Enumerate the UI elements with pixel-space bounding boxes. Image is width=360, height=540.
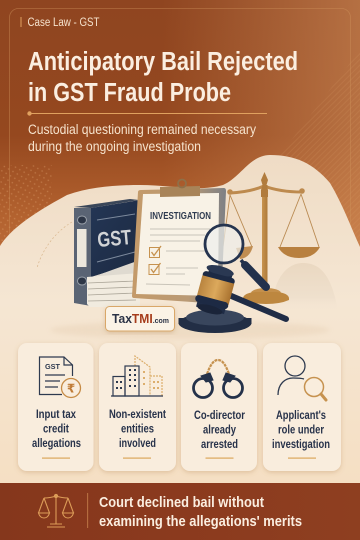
label: entities [121,424,154,436]
label: involved [119,438,156,450]
icon: GST document with rupee [40,357,80,398]
illustration [50,172,338,339]
icon: magnifying glass [205,225,266,287]
label [109,409,166,450]
icon: investigation clipboard [132,180,226,304]
icon: gavel [178,262,286,333]
label: allegations [32,438,81,450]
icon: handcuffs [194,360,242,398]
label: investigation [272,439,330,451]
title: Anticipatory Bail Rejected [28,48,298,76]
panel: co-director arrested [181,343,257,471]
label: Input tax [36,409,76,421]
label [272,410,330,451]
footer text: Court declined bail without [99,495,264,511]
title: in GST Fraud Probe [28,79,231,107]
logo badge [106,306,174,331]
category tag: Case Law - GST [28,17,100,29]
icon: scales of justice [223,172,320,304]
label: arrested [201,439,238,451]
icon: GST document with rupee: GST [45,362,60,371]
header background [0,0,360,270]
label [32,409,81,450]
title [28,48,298,107]
title rule [27,111,267,116]
footer band [0,483,360,540]
subtitle [28,122,256,154]
label: Non-existent [109,409,166,421]
logo badge: TaxTMI.com [112,311,169,326]
label: already [203,424,236,436]
panel: non-existent entities [99,343,176,471]
cream wave background [0,155,360,484]
icon: investigation clipboard: INVESTIGATION [150,210,211,222]
dashed arc [37,222,72,268]
label: Applicant's [276,410,326,422]
panel: input tax credit [18,343,94,471]
label: credit [43,424,69,436]
icon: GST binder [74,199,140,307]
icon: person with magnifier [278,356,326,400]
icon: footer scales [38,494,74,527]
icon: GST document with rupee: ₹ [67,382,75,396]
footer text [99,495,302,530]
label: role under [278,424,324,436]
subtitle: during the ongoing investigation [28,139,201,154]
label: Co-director [194,410,245,422]
panel: applicant's role [263,343,341,471]
icon: buildings [111,356,163,396]
label [194,410,245,451]
footer text: examining the allegations' merits [99,514,302,530]
subtitle: Custodial questioning remained necessary [28,122,256,137]
icon: GST binder: GST [96,226,132,252]
